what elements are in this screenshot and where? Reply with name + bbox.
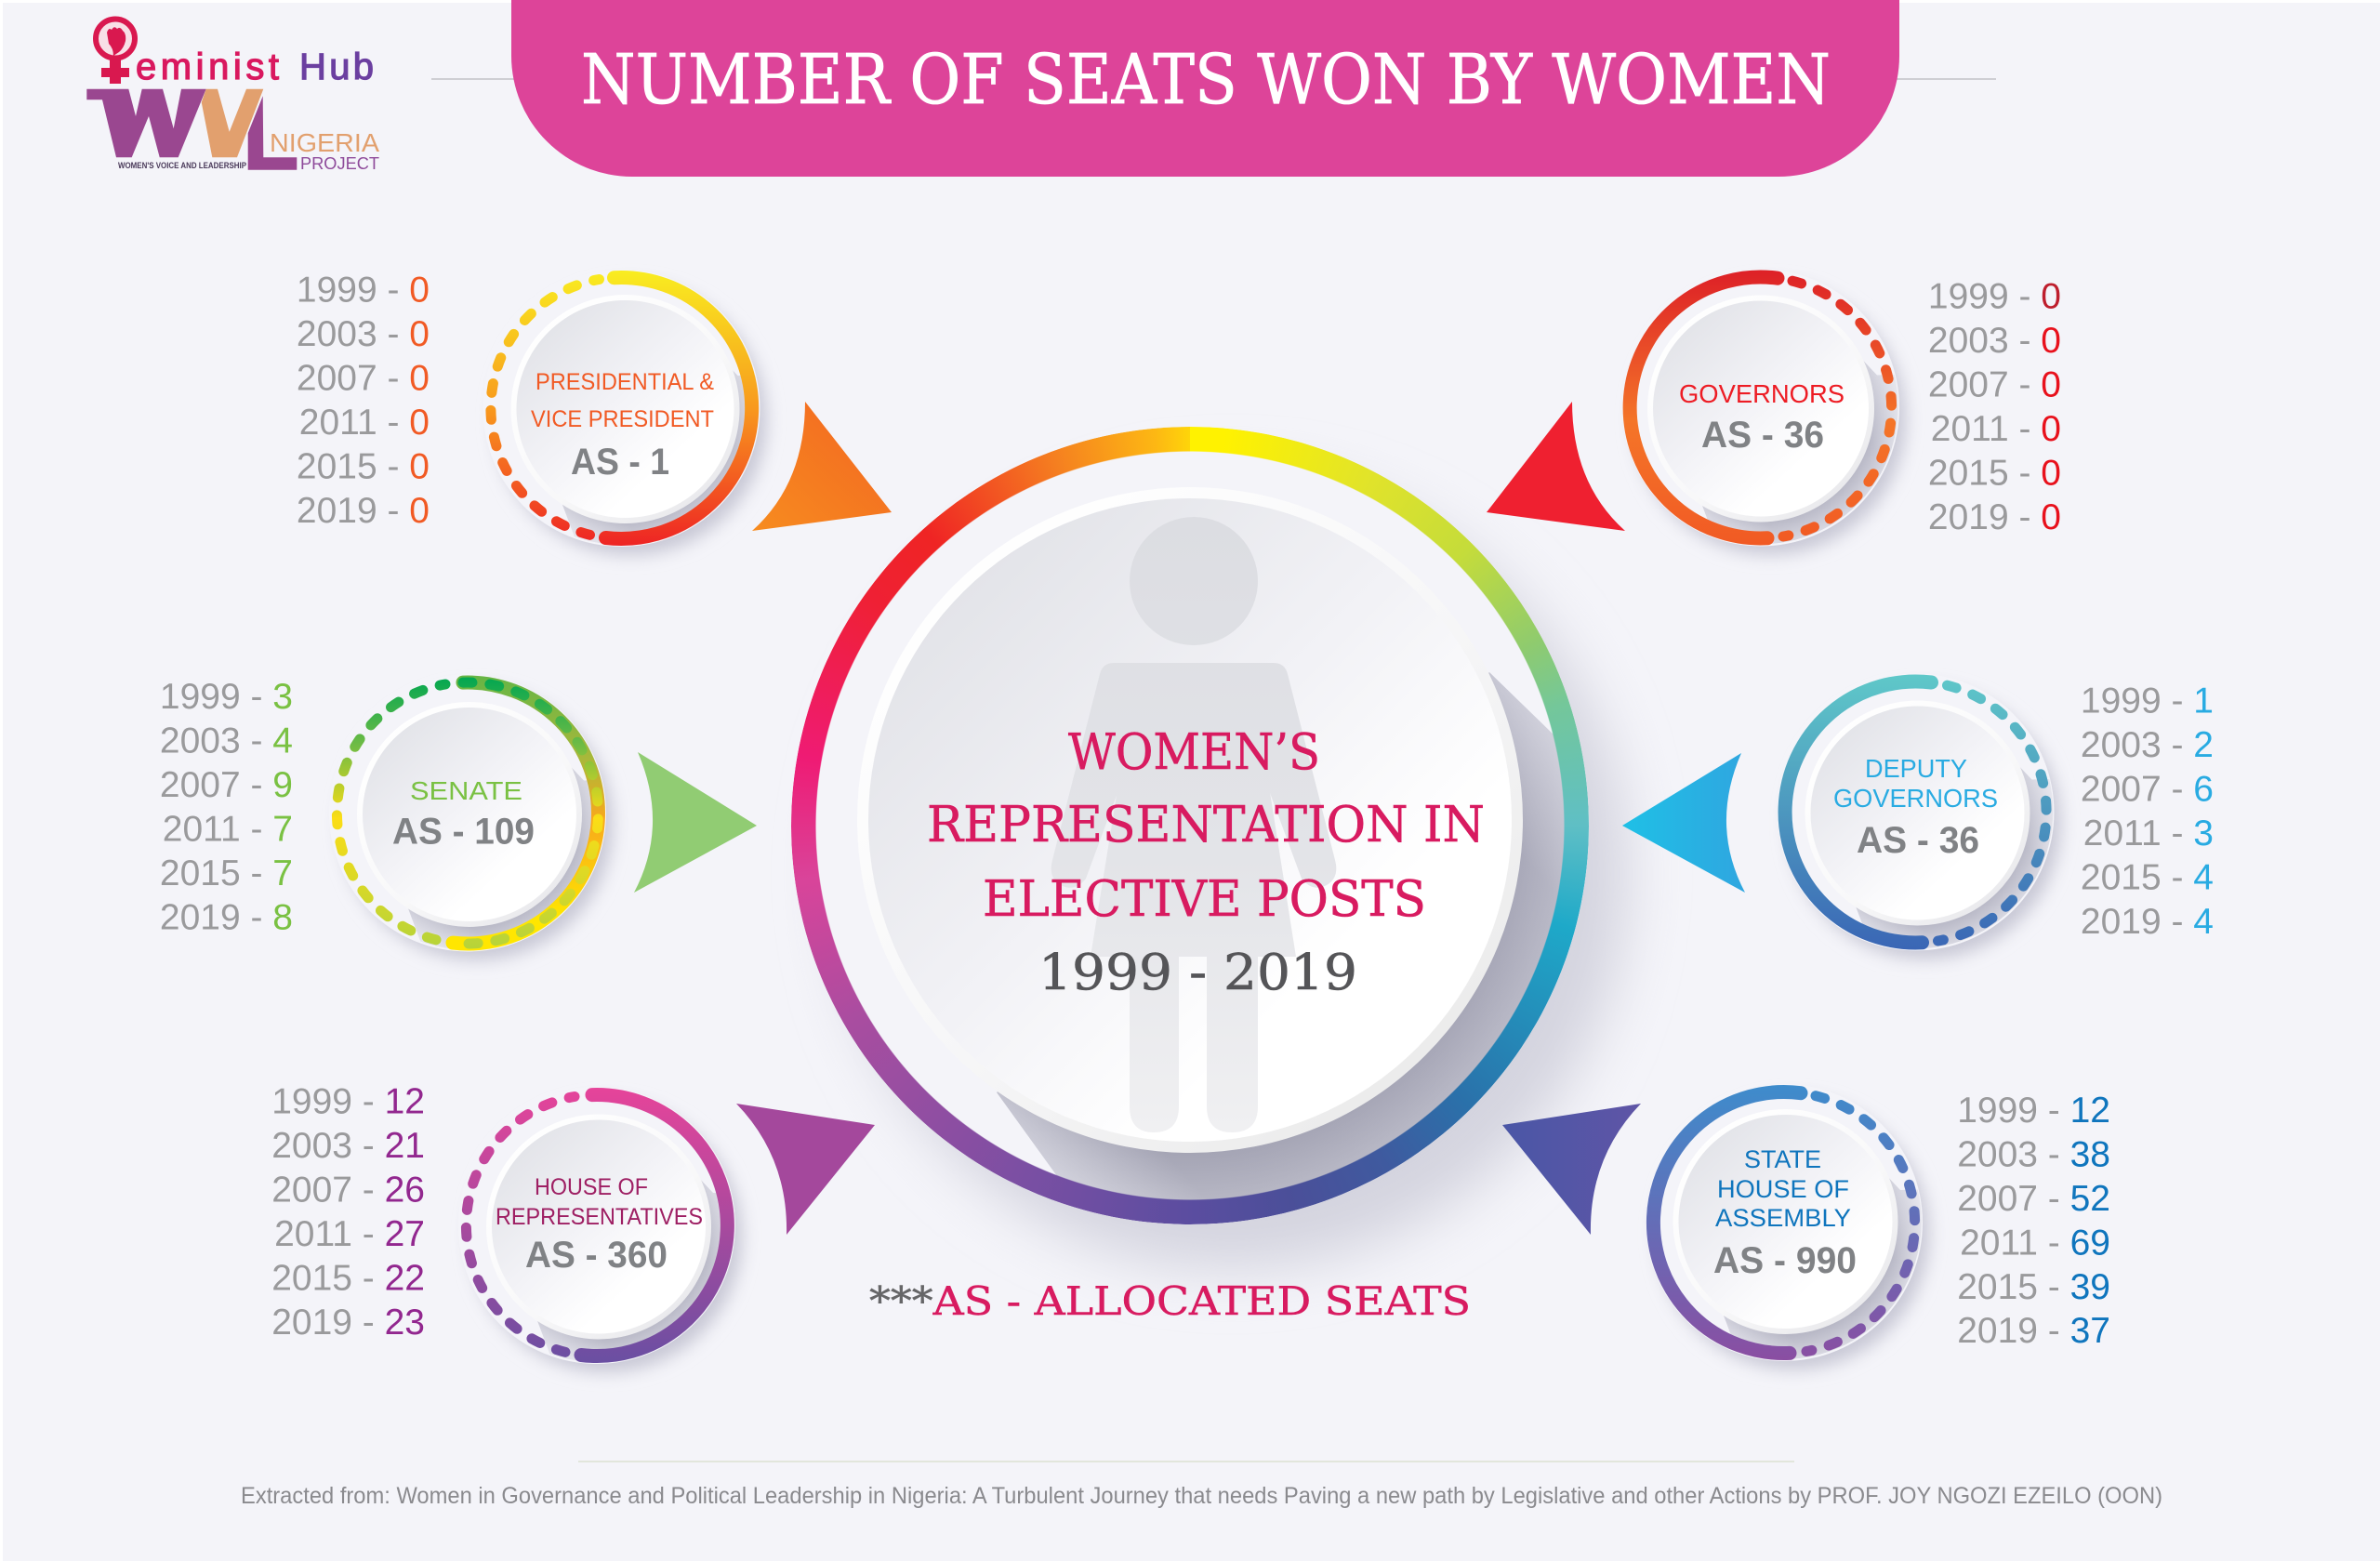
allocated seats: AS - 990 — [1713, 1240, 1857, 1281]
arrow — [1487, 402, 1625, 531]
year list: 2007 - 0 — [297, 359, 430, 398]
legend: allocated seats note: ***AS - ALLOCATED SEATS — [869, 1278, 1471, 1324]
year list: 2003 - 2 — [2081, 725, 2214, 765]
year list: 2003 - 38 — [1957, 1134, 2110, 1175]
badge label — [531, 369, 714, 432]
year list: 2019 - 8 — [160, 898, 293, 937]
year list: 2007 - 0 — [1928, 364, 2061, 405]
logo: Feminist Hub / WVL Nigeria — [86, 19, 379, 173]
text: Feminist Hub — [136, 46, 374, 87]
badge label — [1715, 1145, 1851, 1232]
year list: 2011 - 69 — [1960, 1224, 2110, 1263]
heading: title: NUMBER OF SEATS WON BY WOMEN — [581, 40, 1831, 120]
heading: women's representation: WOMEN’S — [1068, 724, 1320, 781]
year list: 2007 - 6 — [2081, 770, 2214, 809]
year list — [160, 677, 293, 937]
year list: 1999 - 12 — [271, 1082, 425, 1121]
badge label: VICE PRESIDENT — [531, 406, 714, 432]
heading: women's representation — [927, 724, 1485, 1001]
badge label: HOUSE OF — [535, 1174, 648, 1200]
year list — [271, 1082, 425, 1343]
heading: women's representation: ELECTIVE POSTS — [983, 871, 1426, 928]
year list: 2015 - 22 — [271, 1259, 425, 1298]
year list: 2003 - 0 — [297, 314, 430, 354]
badge — [329, 675, 613, 959]
arrow — [736, 1104, 875, 1235]
year list: 2011 - 0 — [1931, 409, 2061, 449]
rainbow ring — [791, 427, 1589, 1224]
text: Feminist Hub: Hub — [299, 46, 374, 87]
badge — [1622, 270, 1906, 554]
badge label: PRESIDENTIAL & — [536, 369, 714, 395]
badge label — [496, 1174, 703, 1230]
year list — [1928, 277, 2061, 537]
badge — [1646, 1084, 1929, 1369]
year list — [1957, 1091, 2110, 1351]
badge — [483, 270, 766, 555]
year list: 2003 - 4 — [160, 721, 293, 761]
year list: 1999 - 1 — [2081, 681, 2214, 721]
logo: Feminist Hub / WVL Nigeria: WOMEN'S VOICE AND LEADERSHIP — [118, 161, 247, 171]
panel: central circle — [791, 427, 1644, 1286]
year list: 2007 - 26 — [271, 1170, 425, 1210]
year list: 2007 - 52 — [1957, 1179, 2110, 1219]
year list — [2081, 681, 2214, 942]
disc with figure and heading — [857, 487, 1523, 1153]
year list: 2015 - 39 — [1957, 1267, 2110, 1307]
allocated seats: AS - 109 — [392, 811, 535, 852]
panel: presidential and vice president — [297, 270, 892, 555]
year list: 2019 - 37 — [1957, 1311, 2110, 1351]
badge label: GOVERNORS — [1833, 784, 1998, 813]
year list: 2007 - 9 — [160, 765, 293, 805]
badge label: REPRESENTATIVES — [496, 1204, 703, 1230]
year list: 2019 - 23 — [271, 1303, 425, 1343]
year list: 2015 - 0 — [1928, 454, 2061, 493]
panel: house of representatives — [271, 1082, 875, 1372]
badge label: GOVERNORS — [1679, 379, 1844, 408]
badge label: ASSEMBLY — [1715, 1204, 1851, 1232]
disc long shadow — [858, 530, 1644, 1286]
year list: 2019 - 0 — [297, 491, 430, 531]
year list: 2019 - 0 — [1928, 497, 2061, 537]
badge label: HOUSE OF — [1717, 1175, 1849, 1203]
year list: 2011 - 0 — [299, 403, 430, 443]
panel: deputy governors — [1622, 673, 2214, 959]
WVL letters — [86, 89, 297, 170]
allocated seats: AS - 36 — [1857, 820, 1979, 861]
year list: 2003 - 21 — [271, 1126, 425, 1166]
arrow — [752, 402, 892, 531]
badge label: SENATE — [410, 776, 522, 805]
year list: 2011 - 27 — [274, 1214, 425, 1254]
arrow — [1502, 1104, 1641, 1235]
panel: governors — [1487, 270, 2061, 554]
text: Nigeria Project: NIGERIA — [270, 128, 379, 157]
heading: women's representation: REPRESENTATION IN — [927, 797, 1485, 853]
heading: women's representation: 1999 - 2019 — [1038, 945, 1357, 1001]
arrow — [634, 752, 757, 893]
title rule — [431, 78, 1996, 80]
allocated seats: AS - 36 — [1701, 415, 1824, 456]
badge — [1778, 673, 2060, 959]
year list: 2019 - 4 — [2081, 902, 2214, 942]
panel: state house of assembly — [1502, 1084, 2110, 1369]
icon: woman figure — [1051, 517, 1336, 1132]
allocated seats: AS - 1 — [571, 442, 669, 483]
year list: 2011 - 3 — [2083, 814, 2214, 853]
badge label: DEPUTY — [1865, 754, 1967, 783]
year list: 2015 - 0 — [297, 446, 430, 487]
text: Feminist Hub: eminist — [136, 46, 279, 87]
logo: Feminist Hub / WVL Nigeria: PROJECT — [300, 154, 379, 173]
year list: 1999 - 0 — [297, 270, 430, 311]
year list: 1999 - 12 — [1957, 1091, 2110, 1131]
panel: senate — [160, 675, 757, 959]
year list: 1999 - 0 — [1928, 277, 2061, 316]
year list — [297, 270, 430, 531]
source note: Extracted from: Women in Governance and Political Leadership in Nigeria: A Turbulent Journey that needs Paving a new path by Legislative and other Actions by PROF. JOY NGOZI EZEILO (OON) — [241, 1483, 2162, 1509]
year list: 2003 - 0 — [1928, 321, 2061, 361]
year list: 2015 - 4 — [2081, 857, 2214, 898]
badge — [458, 1087, 742, 1372]
badge label — [1833, 754, 1998, 813]
year list: 2011 - 7 — [163, 809, 293, 850]
year list: 2015 - 7 — [160, 853, 293, 893]
year list: 1999 - 3 — [160, 677, 293, 717]
arrow — [1622, 753, 1745, 893]
allocated seats: AS - 360 — [525, 1235, 668, 1276]
badge label: STATE — [1744, 1145, 1821, 1173]
icon: female symbol with fist — [96, 19, 135, 84]
title banner — [511, 0, 1899, 177]
